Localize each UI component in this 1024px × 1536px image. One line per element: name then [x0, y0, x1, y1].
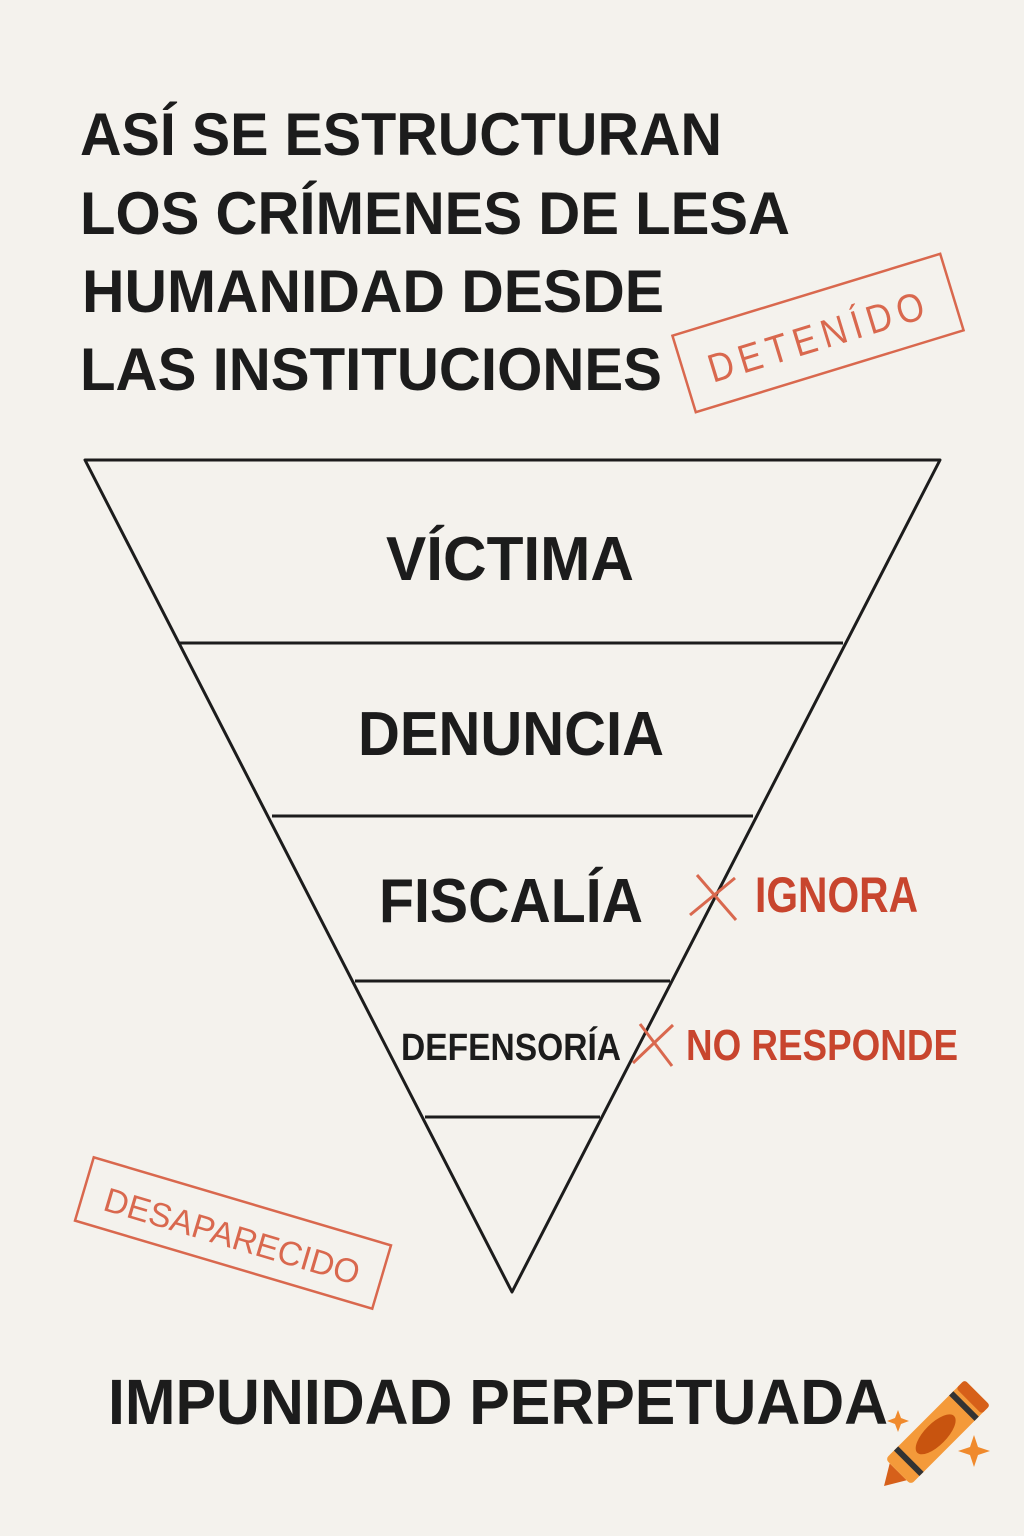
level labels: DENUNCIA: [358, 700, 664, 769]
title: LOS CRÍMENES DE LESA: [80, 180, 790, 247]
level labels: DEFENSORÍA: [401, 1025, 621, 1069]
stamp: detenido: [672, 254, 964, 412]
stamp: detenido: DETENÍDO: [702, 281, 936, 391]
title: ASÍ SE ESTRUCTURAN: [80, 101, 722, 168]
title: [80, 101, 790, 403]
inverted pyramid: [85, 460, 940, 1292]
title: LAS INSTITUCIONES: [80, 336, 662, 403]
stamp: desaparecido: DESAPARECIDO: [99, 1181, 364, 1293]
level labels: VÍCTIMA: [386, 525, 634, 594]
title: HUMANIDAD DESDE: [82, 258, 664, 325]
level labels: [358, 525, 664, 1069]
callout: ignora: IGNORA: [755, 867, 918, 923]
callout: no responde: NO RESPONDE: [686, 1021, 958, 1070]
icon: crayon: [871, 1380, 990, 1499]
level labels: FISCALÍA: [379, 867, 643, 936]
callout: ignora: [690, 867, 918, 923]
bottom conclusion: IMPUNIDAD PERPETUADA: [108, 1366, 888, 1438]
stamp: desaparecido: [75, 1157, 391, 1309]
